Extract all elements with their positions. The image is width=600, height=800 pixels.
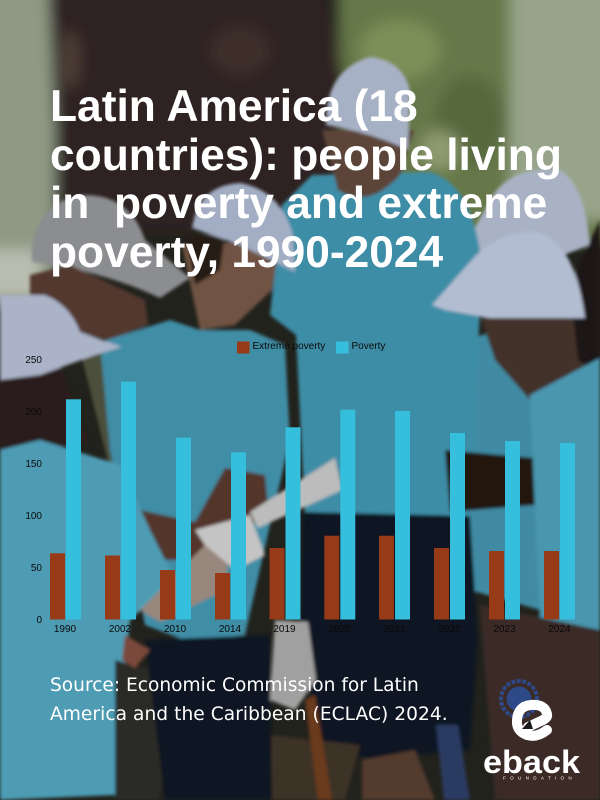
centre man shirt [270,172,482,525]
camo trousers [115,660,162,800]
x axis labels: 1990 [54,624,77,635]
icon: e mark [517,705,547,736]
centre man cap [326,57,410,150]
legend: Poverty [352,341,385,352]
x axis labels: 2021 [383,624,406,635]
legend [237,341,385,354]
lower leg [362,750,435,800]
title: poverty, 1990-2024 [50,228,443,277]
source note: America and the Caribbean (ECLAC) 2024. [50,704,448,725]
clipboard [250,458,342,528]
middle man face [182,240,280,330]
title: in poverty and extreme [50,179,547,228]
y axis labels: 250 [25,355,42,366]
logo tagline: FOUNDATION [503,776,576,780]
middle man cap [192,183,295,272]
left man face [30,265,148,340]
left girl shirt [0,440,175,800]
left girl hair [0,365,88,460]
y axis labels: 100 [25,511,42,522]
x axis labels [54,624,571,635]
x axis labels: 2024 [548,624,571,635]
dark trousers [145,635,272,800]
x axis labels: 2023 [493,624,516,635]
prosthetic frame [436,725,470,800]
legend: Extreme poverty [252,341,325,352]
back right person shirt [450,320,565,610]
right woman pants [480,605,600,800]
y axis labels: 200 [25,407,42,418]
poverty bars [66,382,575,620]
middle man hair [186,235,225,285]
writing arm [140,468,268,560]
icon: UN emblem [501,681,537,717]
logo wordmark: eback [483,744,580,780]
hand [122,635,150,668]
y axis labels: 0 [36,615,42,626]
x axis labels: 2010 [164,624,187,635]
ground [268,735,360,800]
title: Latin America (18 [50,82,418,131]
lower glove [270,620,316,710]
x axis labels: 2002 [109,624,132,635]
y axis labels [25,355,42,626]
x axis labels: 2020 [328,624,351,635]
back right person cap [445,169,590,283]
left girl arm and glove [140,540,230,622]
middle man shirt [100,320,290,642]
centre man face [322,130,414,197]
x axis labels: 2019 [273,624,296,635]
title: countries): people living [50,131,562,180]
wooden stick [305,695,332,800]
right woman cap [432,232,585,318]
y axis labels: 150 [25,459,42,470]
right woman hair and face [480,315,590,400]
logo: eback foundation [483,679,580,780]
olive jacket [80,345,150,510]
centre man pants [300,512,478,760]
source note: Source: Economic Commission for Latin [50,675,419,696]
source note [50,675,448,725]
right woman shirt [530,358,600,645]
x axis labels: 2014 [219,624,242,635]
x axis labels: 2022 [438,624,461,635]
y axis labels: 50 [31,563,42,574]
dark forearm [445,450,535,512]
extreme poverty bars [50,536,559,620]
left girl cap [0,295,122,380]
title [50,82,562,277]
left man cap [32,195,190,298]
